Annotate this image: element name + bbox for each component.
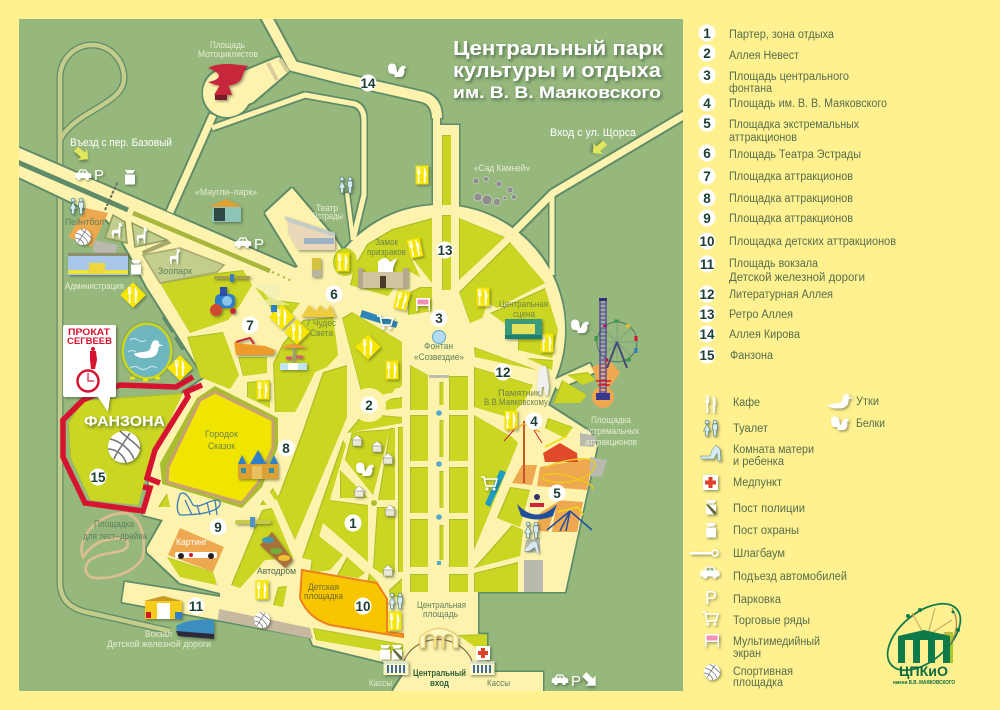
- icons: squirrels: [356, 64, 589, 476]
- legend: symbols: площадка: [733, 677, 784, 689]
- test-drive track: [82, 513, 148, 578]
- fountain and dots: [429, 330, 449, 565]
- central arch: [420, 628, 458, 648]
- panel: fanzone: ФАНЗОНА: [84, 413, 165, 430]
- top ride: [214, 274, 250, 282]
- maugli park building: [209, 199, 242, 222]
- arrow: bottom parking: [579, 669, 601, 691]
- map number badges: 7: [246, 318, 254, 333]
- icons: cars and parking: [75, 167, 581, 690]
- legend: numbered zones: 8: [703, 191, 711, 206]
- map labels: Въезд с пер. Базовый: [70, 137, 172, 149]
- legend: symbols: P: [705, 588, 717, 608]
- alley nodes: [352, 388, 403, 506]
- map labels: Театр: [316, 203, 338, 214]
- segway rental sign: [63, 325, 116, 412]
- segway rental sign: СЕГВЕЕВ: [67, 336, 112, 347]
- panel: park map ground: [19, 19, 683, 691]
- map number badges: 12: [495, 365, 511, 380]
- map labels: Администрация: [65, 281, 124, 292]
- legend: numbered zones: Площадь центрального: [729, 71, 849, 83]
- legend: numbered zones: Площадь вокзала: [729, 258, 819, 270]
- map number badges: 9: [214, 520, 222, 535]
- monument mayakovsky: [537, 366, 549, 395]
- test-drive track: Площадка: [94, 519, 135, 530]
- legend: symbols: Медпункт: [733, 477, 783, 489]
- map labels: Эстрады: [312, 211, 343, 222]
- legend: numbered zones: Площадка детских аттракционов: [729, 236, 896, 248]
- legend: numbered zones: Фанзона: [730, 350, 774, 362]
- legend: symbols: Пост охраны: [733, 525, 799, 537]
- legend: numbered zones: 14: [699, 327, 715, 342]
- legend: numbered zones: 15: [699, 348, 715, 363]
- gorodok skazok: [160, 386, 278, 508]
- icons: gazebos: [352, 435, 396, 576]
- carousel: [280, 344, 307, 370]
- test-drive track: для тест–драйва: [83, 531, 148, 542]
- legend: numbered zones: 9: [703, 211, 711, 226]
- map labels: 7 Чудес: [306, 318, 336, 329]
- gorodok skazok: Городок: [205, 429, 239, 440]
- map number badges: [90, 74, 566, 614]
- legend: symbols: Туалет: [733, 423, 769, 435]
- road network: [10, 9, 693, 691]
- map number badges: 11: [189, 599, 204, 614]
- map number badges: 10: [355, 599, 371, 614]
- small ride 9: [235, 517, 271, 527]
- legend: symbols: Пост полиции: [733, 503, 805, 515]
- ticket offices: [384, 661, 494, 675]
- seven wonders tents: [301, 305, 336, 317]
- gorodok skazok: Сказок: [208, 441, 236, 452]
- ghost castle: [358, 258, 408, 288]
- zoo enclosures: [105, 215, 224, 283]
- map labels: Фонтан: [424, 341, 453, 352]
- map number badges: 8: [282, 441, 290, 456]
- market stall strip east: [485, 470, 506, 507]
- legend: numbered zones: Площадка аттракционов: [729, 213, 853, 225]
- train ride: [210, 287, 236, 316]
- map number badges: 2: [365, 398, 373, 413]
- mother room icon: [524, 542, 539, 553]
- legend: numbered zones: Площадь Театра Эстрады: [729, 149, 861, 161]
- map labels: Замок: [375, 237, 399, 248]
- legend: symbols: Комната матери: [733, 444, 814, 456]
- railway station: [144, 596, 182, 619]
- icons: guard posts: [125, 170, 402, 660]
- yellow booth: [312, 258, 321, 277]
- logo: имени В.В. МАЯКОВСКОГО: [893, 680, 955, 686]
- map number badges: 14: [360, 76, 376, 91]
- legend: numbered zones: 13: [699, 307, 715, 322]
- legend: numbered zones: 10: [699, 234, 715, 249]
- map labels: Площадка: [591, 415, 632, 426]
- ferris wheel: [596, 298, 637, 400]
- legend: symbols: Утки: [856, 396, 879, 408]
- map number badges: 1: [349, 516, 357, 531]
- legend: numbered zones: 7: [703, 169, 711, 184]
- karting field: [168, 528, 224, 572]
- map number badges: 3: [435, 311, 443, 326]
- map number badges: 5: [553, 486, 561, 501]
- map labels: Вокзал: [145, 629, 172, 640]
- map labels: Центральная: [499, 299, 548, 310]
- grey service lots: [93, 240, 607, 592]
- logo: [876, 591, 972, 686]
- map number badges: 13: [437, 243, 453, 258]
- legend: symbols: Шлагбаум: [733, 548, 785, 560]
- pond with duck: [121, 322, 173, 380]
- legend: symbols: Кафе: [733, 397, 760, 409]
- legend: symbols: Подъезд автомобилей: [733, 571, 847, 583]
- legend: numbered zones: 12: [699, 287, 715, 302]
- legend: numbered zones: 6: [703, 146, 711, 161]
- map labels: Детской железной дороги: [107, 639, 211, 650]
- map labels: Зоопарк: [158, 266, 193, 277]
- icon: barrier: [105, 181, 118, 210]
- icons: cars and parking: P: [94, 167, 104, 184]
- legend: numbered zones: аттракционов: [729, 132, 797, 144]
- map labels: Центральная: [417, 600, 466, 611]
- central stage: [505, 319, 542, 339]
- map labels: сцена: [513, 309, 536, 320]
- icons: toilets: [70, 177, 538, 609]
- legend: numbered zones: Ретро Аллея: [729, 309, 793, 321]
- map labels: вход: [430, 678, 449, 689]
- legend: numbered zones: Партер, зона отдыха: [729, 29, 835, 41]
- map number badges: 15: [90, 470, 106, 485]
- legend: numbered zones: Площадка аттракционов: [729, 193, 853, 205]
- motorcyclists monument: [208, 64, 248, 100]
- icons: ball courts: [75, 229, 270, 628]
- icons: carts: [377, 316, 497, 490]
- map labels: призраков: [367, 247, 406, 258]
- train: [176, 620, 214, 639]
- legend: numbered zones: 4: [703, 96, 711, 111]
- legend: symbols: Парковка: [733, 594, 782, 606]
- fairy castle: [238, 450, 278, 479]
- map number badges: 4: [530, 414, 538, 429]
- map labels: Кассы: [369, 678, 392, 689]
- legend: numbered zones: 1: [703, 26, 711, 41]
- karting field: Картинг: [176, 537, 207, 548]
- icons: cars and parking: P: [254, 236, 264, 253]
- map labels: [65, 40, 639, 689]
- kids playground: площадка: [304, 591, 344, 602]
- autodrome: [260, 532, 293, 568]
- legend: symbols: Белки: [856, 418, 885, 430]
- legend: numbered zones: 11: [700, 257, 715, 272]
- paintball field: [68, 208, 108, 247]
- map labels: Света: [310, 328, 334, 339]
- legend: numbered zones: Площадь им. В. В. Маяковского: [729, 98, 887, 110]
- icons: cafe signs: [120, 166, 553, 630]
- map labels: Памятник: [498, 388, 541, 399]
- road medians: [15, 59, 292, 350]
- map labels: «Сад Камней»: [474, 163, 530, 174]
- title: Центральный парк: [453, 38, 664, 60]
- medical post: [476, 646, 490, 660]
- map labels: Центральный: [413, 668, 466, 679]
- kids playground: Детская: [308, 582, 339, 593]
- legend: numbered zones: 3: [703, 68, 711, 83]
- sport strip: [218, 609, 313, 639]
- map labels: Мотоциклистов: [198, 49, 258, 60]
- legend: numbered zones: Литературная Аллея: [729, 289, 833, 301]
- title: [453, 38, 664, 102]
- legend: numbered zones: 2: [703, 46, 711, 61]
- panel: fanzone: [63, 377, 202, 511]
- blue coaster: [177, 493, 220, 515]
- title: культуры и отдыха: [453, 60, 662, 82]
- legend: numbered zones: фонтана: [729, 83, 773, 95]
- map labels: площадь: [423, 609, 458, 620]
- map labels: В.В.Маяковскому: [484, 397, 548, 408]
- lime garden patches: [158, 135, 595, 655]
- legend: numbered zones: Аллея Кирова: [729, 329, 801, 341]
- legend: numbered zones: [698, 24, 896, 364]
- legend: symbols: [690, 394, 885, 689]
- arrow: shchors entrance: [588, 137, 610, 159]
- legend: symbols: и ребенка: [733, 456, 785, 468]
- legend: symbols: Торговые ряды: [733, 615, 810, 627]
- legend: numbered zones: 5: [703, 116, 711, 131]
- map labels: Автодром: [257, 566, 296, 577]
- extreme rides: [504, 421, 595, 531]
- icons: cars and parking: P: [571, 673, 581, 690]
- chain swing: [255, 285, 290, 312]
- title: им. В. В. Маяковского: [453, 83, 661, 102]
- slide ride: [234, 338, 275, 355]
- map labels: «Созвездие»: [414, 352, 464, 363]
- map labels: Площадь: [210, 40, 245, 51]
- legend: numbered zones: Детской железной дороги: [729, 272, 865, 284]
- legend: symbols: экран: [733, 648, 761, 660]
- arrow: base entrance: [71, 143, 93, 165]
- map labels: «Маугли–парк»: [195, 187, 257, 198]
- walking track: [60, 45, 170, 631]
- map labels: аттракционов: [585, 437, 637, 448]
- map labels: Пейнтбол: [65, 217, 104, 228]
- legend: symbols: Спортивная: [733, 666, 793, 678]
- legend: numbered zones: Площадка аттракционов: [729, 171, 853, 183]
- kids playground: [300, 570, 403, 637]
- map labels: Вход с ул. Щорса: [550, 127, 637, 139]
- map number badges: 6: [330, 287, 338, 302]
- administration building: [68, 253, 128, 275]
- theatre building: [284, 216, 335, 250]
- legend: numbered zones: Площадка экстремальных: [729, 119, 859, 131]
- orange ride grounds: [512, 360, 620, 532]
- stone garden: [473, 176, 516, 206]
- map labels: экстремальных: [582, 426, 639, 437]
- logo: ЦПКиО: [899, 663, 948, 679]
- legend: numbered zones: Аллея Невест: [729, 50, 800, 62]
- legend: symbols: Мультимедийный: [733, 636, 820, 648]
- map labels: Кассы: [487, 678, 510, 689]
- market stall strip: [360, 310, 398, 328]
- icon: multimedia screen: [416, 298, 430, 311]
- segway rental sign: ПРОКАТ: [68, 327, 110, 338]
- entrance arc: [403, 639, 473, 664]
